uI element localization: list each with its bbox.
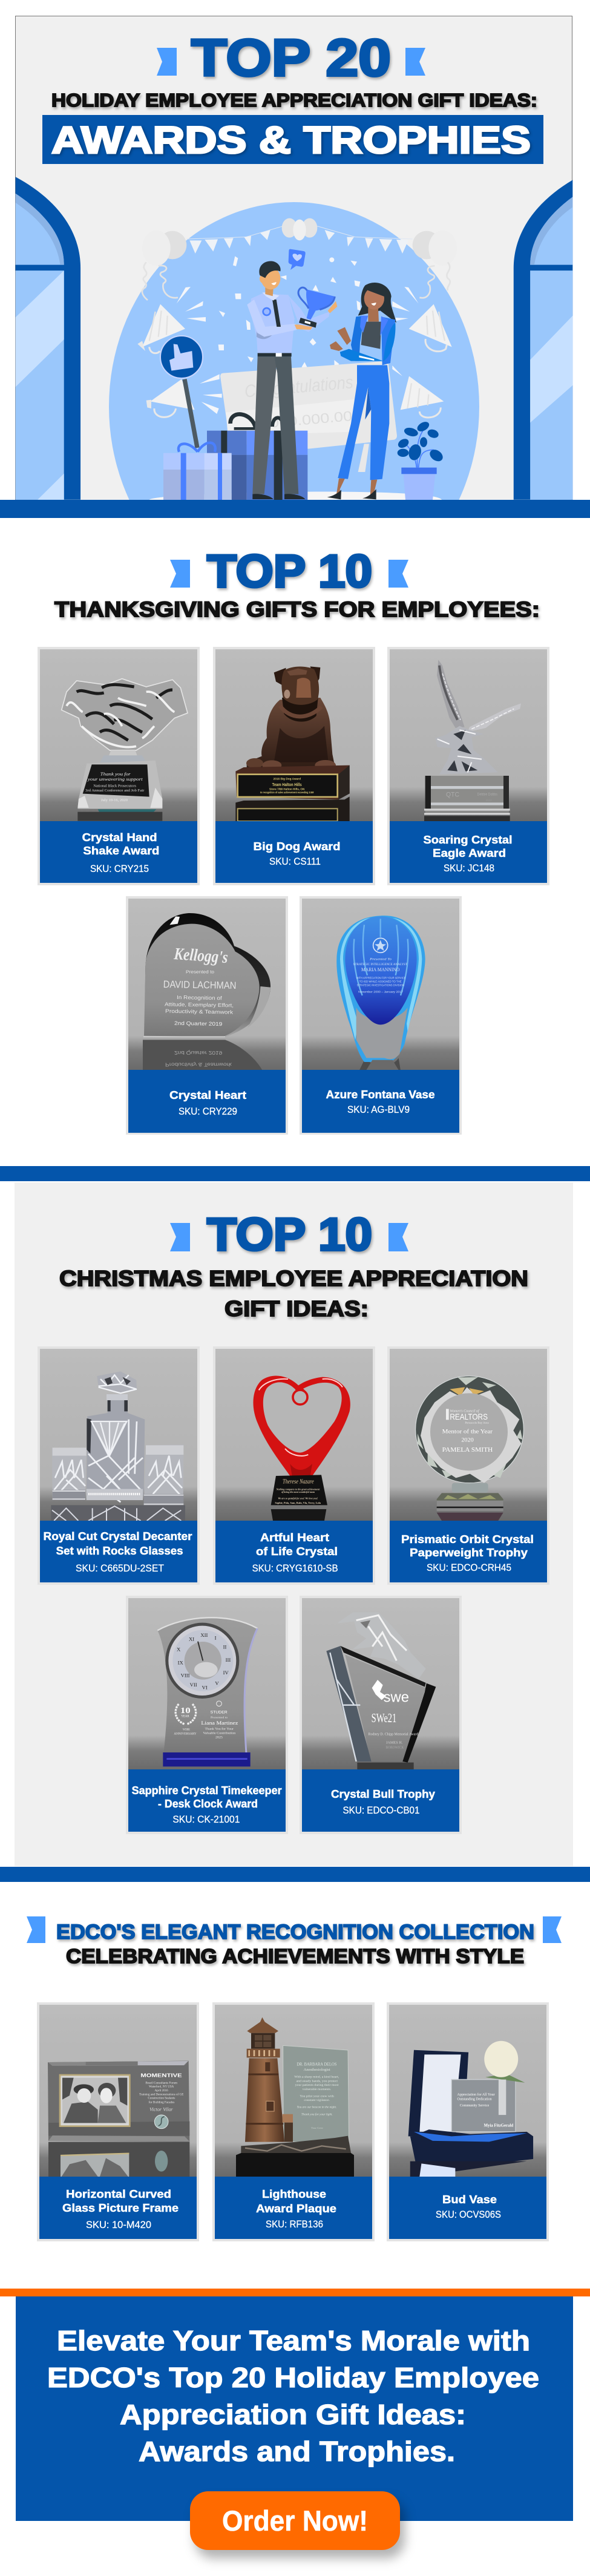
recognition collection heading: EDCO'S ELEGANT RECOGNITION COLLECTION bbox=[56, 1921, 534, 1944]
product: crystal desk clock: 10 bbox=[180, 1706, 191, 1716]
card: big dog award: SKU: CS111 bbox=[269, 856, 321, 867]
product: crystal desk clock: V bbox=[215, 1680, 219, 1686]
product: crystal desk clock: IX bbox=[178, 1659, 184, 1665]
card: lighthouse award plaque: SKU: RFB136 bbox=[266, 2219, 323, 2230]
streamers bbox=[142, 262, 450, 300]
christmas heading: TOP 10 bbox=[207, 1209, 372, 1260]
product: glass picture frame: MOMENTIVE bbox=[140, 2073, 182, 2079]
product: crystal desk clock: X bbox=[177, 1646, 181, 1652]
product: blue glass vase bbox=[336, 916, 425, 1070]
card: royal cut crystal decanter bbox=[38, 1346, 200, 1585]
card: azure fontana vase: SKU: AG-BLV9 bbox=[347, 1104, 410, 1115]
product: crystal eagle: Debbie Dobbs bbox=[477, 793, 497, 796]
hero subtitle: HOLIDAY EMPLOYEE APPRECIATION GIFT IDEAS: bbox=[51, 90, 537, 111]
product: bronze bulldog bbox=[235, 666, 350, 821]
product: red glass heart: Therese Nazare bbox=[283, 1479, 314, 1486]
product: glass picture frame: for Building Facades bbox=[149, 2101, 174, 2104]
balloons and bunting bbox=[161, 218, 434, 265]
product: crystal heart: Kellogg's bbox=[173, 945, 229, 967]
card: bud vase: SKU: OCVS06S bbox=[436, 2209, 501, 2220]
product: glass picture frame: Brazil Consultants Forum bbox=[145, 2082, 177, 2085]
call to action text: Elevate Your Team's Morale with bbox=[57, 2325, 530, 2356]
call to action panel bbox=[16, 2296, 573, 2521]
product: crystal eagle: QTC bbox=[446, 791, 459, 798]
man holding trophy bbox=[247, 261, 337, 499]
product: bronze lighthouse with plaque: DR. BARBARA DELOS bbox=[297, 2062, 336, 2067]
thanksgiving section heading: TOP 10 bbox=[207, 546, 372, 597]
product: crystal bull: SWe21 bbox=[372, 1712, 396, 1725]
product: crystal bull: Rodney D. Chipp Memorial Award bbox=[369, 1732, 419, 1737]
product: crystal desk clock: VII bbox=[190, 1682, 197, 1688]
order now button: Order Now! bbox=[222, 2505, 368, 2537]
product: bud vase in box bbox=[408, 2041, 533, 2177]
card: crystal heart bbox=[126, 896, 288, 1135]
product: faceted crystal disc: PAMELA SMITH bbox=[442, 1447, 493, 1454]
product: bronze lighthouse with plaque: You are our beacon in the night. bbox=[297, 2106, 336, 2109]
product: faceted crystal disc bbox=[416, 1376, 523, 1521]
card: crystal bull trophy bbox=[300, 1596, 462, 1834]
product: bud vase in box: Community Service bbox=[460, 2103, 490, 2108]
product: bud vase in box: Myia FitzGerald bbox=[484, 2123, 513, 2128]
product: bronze lighthouse with plaque: With a sharp mind, a kind heart, bbox=[294, 2076, 339, 2079]
card: royal cut crystal decanter: SKU: C665DU-2SET bbox=[76, 1563, 164, 1574]
card: bud vase bbox=[387, 2002, 549, 2241]
hero title: top 20 bbox=[157, 29, 425, 87]
product: glass picture frame: Training and Demonstrations of GE bbox=[139, 2093, 183, 2096]
heart speech bubble bbox=[289, 249, 306, 270]
card: big dog award: Big Dog Award bbox=[253, 841, 340, 853]
product: bud vase in box: Appreciation for All Your bbox=[457, 2092, 495, 2097]
product: crystal heart: 2nd Quarter 2019 bbox=[174, 1020, 223, 1027]
product: crystal desk clock: III bbox=[226, 1657, 231, 1663]
product: glass picture frame: April 2016 bbox=[155, 2089, 168, 2093]
card: lighthouse award plaque: Lighthouse bbox=[262, 2188, 326, 2200]
product: crystal heart bbox=[143, 913, 270, 1070]
right arched window bbox=[514, 180, 572, 500]
product: faceted crystal disc: 2020 bbox=[461, 1437, 474, 1443]
plant bbox=[396, 420, 445, 500]
card: crystal bull trophy: SKU: EDCO-CB01 bbox=[343, 1805, 420, 1816]
product: glass picture frame: Waterford, NY USA bbox=[149, 2086, 174, 2089]
product: faceted crystal disc: Mentor of the Year bbox=[442, 1428, 493, 1435]
product: crystal handshake: 3rd Annual Conference and Job Fair bbox=[85, 788, 144, 793]
product: bronze bulldog: 2016 Big Dog Award bbox=[274, 777, 301, 780]
product: glass picture frame: Victor Vilar bbox=[149, 2106, 173, 2112]
recognition collection heading: CELEBRATING ACHIEVEMENTS WITH STYLE bbox=[66, 1945, 524, 1967]
card: artful heart of life crystal bbox=[213, 1346, 375, 1585]
hero footer band bbox=[0, 500, 590, 518]
product: red glass heart: We are so grateful for you! We love you! bbox=[278, 1496, 318, 1499]
product: blue glass vase: TO ISD WHILE ASSIGNED TO THE bbox=[359, 980, 402, 983]
card: crystal hand shake award: SKU: CRY215 bbox=[90, 864, 149, 874]
product: crystal desk clock: 2025 bbox=[215, 1736, 223, 1739]
product: bronze lighthouse with plaque: constant vigilance. bbox=[304, 2099, 330, 2102]
call to action text: Awards and Trophies. bbox=[139, 2436, 455, 2467]
card: big dog award bbox=[213, 647, 375, 885]
product: bronze lighthouse with plaque bbox=[236, 2017, 354, 2177]
product: crystal eagle: 2022 bbox=[486, 799, 492, 802]
card: royal cut crystal decanter: Set with Rocks Glasses bbox=[56, 1545, 183, 1557]
section band bbox=[0, 1166, 590, 1181]
gift boxes bbox=[163, 415, 307, 500]
product: crystal handshake: Thank you for bbox=[100, 771, 131, 776]
product: crystal heart: Productivity & Teamwork bbox=[165, 1062, 232, 1068]
product: crystal desk clock: VIII bbox=[181, 1673, 190, 1679]
christmas heading bbox=[59, 1209, 528, 1321]
card: soaring crystal eagle award: Soaring Crystal bbox=[424, 834, 512, 846]
product: glass picture frame: Construction Sealants bbox=[148, 2097, 175, 2100]
call to action text: Appreciation Gift Ideas: bbox=[120, 2399, 466, 2430]
product: crystal desk clock: Thank You for Your bbox=[205, 1728, 234, 1731]
card: horizontal curved glass picture frame: Horizontal Curved bbox=[66, 2188, 171, 2200]
product: bronze bulldog: Team Halton Hills bbox=[272, 783, 302, 787]
product: bud vase in box: Outstanding Dedication bbox=[457, 2097, 492, 2101]
thanksgiving section heading: THANKSGIVING GIFTS FOR EMPLOYEES: bbox=[54, 598, 540, 621]
product: crystal handshake: your unwavering support bbox=[87, 776, 143, 782]
section band bbox=[0, 1867, 590, 1882]
card: prismatic orbit crystal paperweight trophy: SKU: EDCO-CRH45 bbox=[427, 1562, 511, 1573]
confetti bbox=[177, 256, 419, 414]
recognition collection heading bbox=[27, 1916, 562, 1967]
card: lighthouse award plaque: Award Plaque bbox=[256, 2203, 336, 2215]
card: horizontal curved glass picture frame: SKU: 10-M420 bbox=[86, 2220, 151, 2230]
card: sapphire crystal timekeeper: - Desk Clock Award bbox=[158, 1798, 258, 1810]
product: crystal eagle bbox=[424, 660, 521, 821]
card: azure fontana vase: Azure Fontana Vase bbox=[326, 1089, 434, 1101]
card: prismatic orbit crystal paperweight trophy bbox=[387, 1346, 549, 1585]
product: glass picture frame bbox=[48, 2061, 189, 2177]
card: lighthouse award plaque bbox=[212, 2002, 375, 2241]
product: blue glass vase: WITH APPRECIATION FOR YOUR SERVICE bbox=[356, 976, 405, 979]
call to action text: EDCO's Top 20 Holiday Employee bbox=[47, 2362, 539, 2393]
product: red glass heart: of being the most wonderful mom bbox=[281, 1490, 315, 1493]
product: crystal handshake: National Black Prosecutors bbox=[93, 785, 137, 788]
card: bud vase: Bud Vase bbox=[442, 2194, 497, 2206]
product: blue glass vase: MARIA MANNINO bbox=[361, 967, 400, 972]
product: bronze bulldog: In recognition of sales achievement exceeding 3.5M bbox=[260, 791, 314, 794]
product: crystal desk clock: XI bbox=[189, 1636, 194, 1642]
illustration: award celebration bbox=[109, 202, 479, 500]
card: horizontal curved glass picture frame bbox=[37, 2002, 199, 2241]
banner: awards and trophies: AWARDS & TROPHIES bbox=[51, 119, 531, 162]
product: crystal desk clock: IV bbox=[223, 1670, 229, 1676]
thanksgiving section heading bbox=[54, 546, 540, 621]
product: bronze lighthouse with plaque: vulnerable moments. bbox=[303, 2088, 331, 2091]
product: crystal desk clock: I bbox=[215, 1634, 217, 1640]
product: crystal handshake bbox=[62, 679, 188, 821]
card: sapphire crystal timekeeper: SKU: CK-21001 bbox=[172, 1814, 240, 1825]
product: crystal desk clock: XII bbox=[200, 1632, 208, 1638]
product: bronze bulldog: Store 7/88 Halton Hills, ON bbox=[269, 788, 304, 791]
hero panel bbox=[15, 16, 572, 500]
product: crystal desk clock: Presented to bbox=[211, 1716, 228, 1719]
card: crystal heart: Crystal Heart bbox=[169, 1089, 246, 1101]
order now button bbox=[190, 2491, 400, 2550]
orange divider bbox=[0, 2289, 590, 2296]
christmas heading: GIFT IDEAS: bbox=[225, 1296, 369, 1321]
christmas section panel bbox=[15, 1182, 573, 1866]
hero title: top 20: TOP 20 bbox=[191, 29, 391, 87]
product: blue glass vase: Presented To bbox=[369, 958, 392, 962]
product: crystal bull bbox=[326, 1612, 436, 1770]
trophy bbox=[298, 287, 335, 328]
card: crystal hand shake award bbox=[38, 647, 200, 885]
product: crystal handshake: July 10-16, 2020 bbox=[101, 799, 128, 802]
product: crystal heart: Presented to bbox=[186, 969, 214, 974]
product: red glass heart bbox=[253, 1375, 350, 1521]
card: soaring crystal eagle award: Eagle Award bbox=[433, 847, 506, 859]
christmas heading: CHRISTMAS EMPLOYEE APPRECIATION bbox=[59, 1266, 528, 1291]
card: azure fontana vase bbox=[300, 896, 462, 1135]
card: artful heart of life crystal: of Life Crystal bbox=[256, 1545, 338, 1558]
card: sapphire crystal timekeeper: Sapphire Crystal Timekeeper bbox=[132, 1785, 282, 1797]
woman applauding bbox=[327, 283, 396, 499]
product: crystal heart: DAVID LACHMAN bbox=[163, 978, 237, 991]
card: prismatic orbit crystal paperweight trophy: Paperweight Trophy bbox=[410, 1547, 528, 1559]
product: bronze lighthouse with plaque: Your Crew bbox=[311, 2126, 324, 2129]
product: bronze lighthouse with plaque: Thank you for your light. bbox=[301, 2114, 333, 2117]
floor bbox=[149, 491, 442, 500]
thumbs-up sign bbox=[160, 336, 203, 448]
product: red glass heart: Sophie, Pola, Sam, Rafa, Vla, Terry, Lola bbox=[275, 1501, 321, 1504]
card: crystal bull trophy: Crystal Bull Trophy bbox=[331, 1788, 435, 1800]
product: faceted crystal disc: Women's Council of bbox=[450, 1409, 480, 1414]
congratulations certificate: 000.000.00 bbox=[269, 408, 353, 431]
card: sapphire crystal timekeeper bbox=[126, 1596, 288, 1834]
product: red glass heart: Nothing compares to the great achievement bbox=[276, 1487, 320, 1490]
product: crystal bull: JAMES H. bbox=[386, 1742, 403, 1745]
product: faceted crystal disc: REALTORS bbox=[450, 1412, 488, 1421]
product: crystal bull: swe bbox=[384, 1689, 409, 1705]
congratulations certificate: Congratulations bbox=[244, 372, 354, 402]
product: bronze lighthouse with plaque: your patients during their most bbox=[295, 2084, 339, 2087]
card: soaring crystal eagle award: SKU: JC148 bbox=[444, 863, 494, 874]
product: crystal heart: Attitude, Exemplary Effort, bbox=[165, 1001, 234, 1008]
product: crystal desk clock bbox=[157, 1617, 257, 1766]
product: crystal bull: BOROWICK bbox=[385, 1746, 404, 1749]
product: blue glass vase: STRATEGIC INTELLIGENCE ANALYST bbox=[353, 963, 407, 966]
card: crystal heart: SKU: CRY229 bbox=[179, 1106, 237, 1117]
card: artful heart of life crystal: SKU: CRYG1610-SB bbox=[252, 1563, 338, 1574]
product: decanter and glasses bbox=[51, 1371, 185, 1521]
congratulations certificate bbox=[220, 361, 397, 472]
party megaphones bbox=[137, 304, 452, 418]
product: bronze lighthouse with plaque: Anesthesiologist bbox=[304, 2068, 330, 2072]
call to action text bbox=[47, 2325, 539, 2467]
product: bronze lighthouse with plaque: You pilot your crew with bbox=[300, 2096, 335, 2099]
card: crystal hand shake award: Shake Award bbox=[83, 845, 159, 857]
product: crystal desk clock: STUDER bbox=[211, 1710, 228, 1714]
product: crystal desk clock: YEAR bbox=[181, 1716, 189, 1719]
card: prismatic orbit crystal paperweight trophy: Prismatic Orbit Crystal bbox=[401, 1533, 534, 1545]
card: crystal hand shake award: Crystal Hand bbox=[82, 831, 157, 844]
product: crystal heart: 2nd Quarter 2019 bbox=[174, 1050, 223, 1056]
product: crystal desk clock: Liana Martinez bbox=[201, 1720, 238, 1726]
product: faceted crystal disc: Pensacola Bay Area bbox=[465, 1421, 489, 1424]
product: blue glass vase: STRATEGIC INVESTIGATIONS DIVISION bbox=[357, 983, 404, 986]
product: crystal heart: In Recognition of bbox=[177, 994, 222, 1001]
card: soaring crystal eagle award bbox=[387, 647, 549, 885]
card: royal cut crystal decanter: Royal Cut Crystal Decanter bbox=[44, 1530, 192, 1542]
product: crystal desk clock: VI bbox=[202, 1685, 208, 1691]
card: artful heart of life crystal: Artful Heart bbox=[260, 1532, 329, 1544]
product: crystal heart: Productivity & Teamwork bbox=[165, 1008, 234, 1015]
card: horizontal curved glass picture frame: Glass Picture Frame bbox=[62, 2202, 179, 2214]
product: crystal desk clock: ANNIVERSARY bbox=[174, 1732, 197, 1735]
background circle bbox=[109, 202, 479, 500]
product: bronze lighthouse with plaque: and steady hands, you protect bbox=[297, 2080, 338, 2083]
product: blue glass vase: November 2000 – January 2017 bbox=[358, 990, 403, 993]
product: crystal desk clock: WORK bbox=[183, 1729, 191, 1732]
product: crystal desk clock: Valuable Contribution bbox=[203, 1732, 236, 1735]
product: crystal desk clock: II bbox=[223, 1644, 227, 1650]
left arched window bbox=[15, 177, 80, 500]
